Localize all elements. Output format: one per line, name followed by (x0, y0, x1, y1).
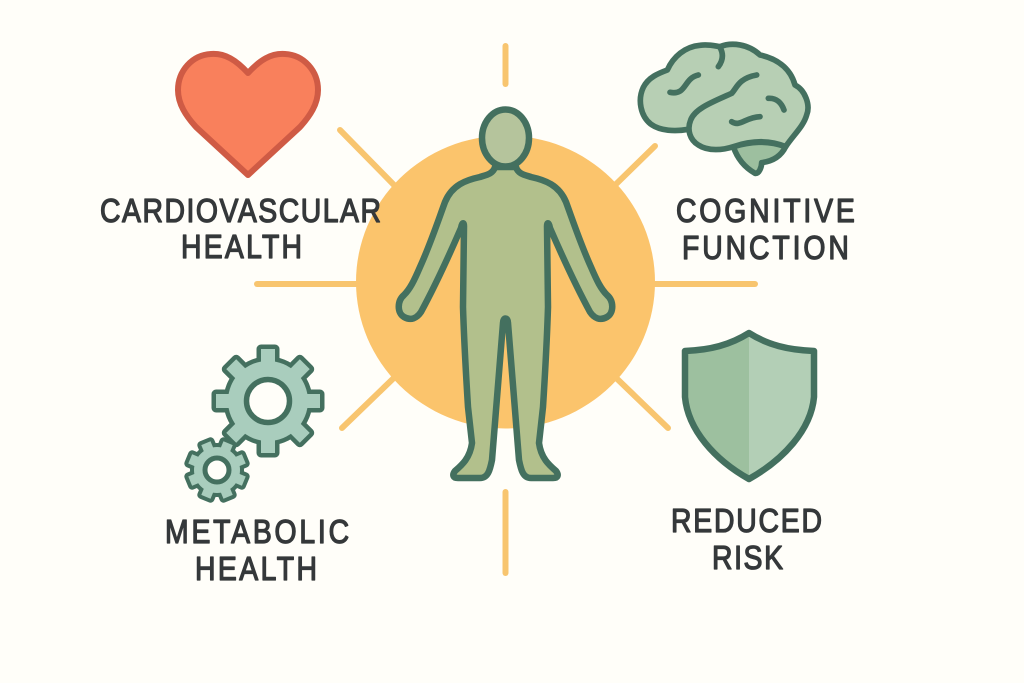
brain outline (640, 44, 808, 150)
label: reduced risk: RISK (712, 539, 783, 577)
label: cardiovascular health: CARDIOVASCULAR (100, 192, 381, 230)
label: reduced risk: REDUCED (671, 502, 822, 540)
label: cognitive function (676, 192, 855, 267)
icon: heart (178, 54, 318, 175)
label: metabolic health: METABOLIC (165, 513, 349, 551)
label: metabolic health: HEALTH (195, 550, 317, 588)
label: cognitive function: FUNCTION (682, 229, 849, 267)
icon: human figure (399, 110, 612, 478)
brain grooves (670, 47, 784, 123)
label: cardiovascular health: HEALTH (181, 228, 302, 266)
label: cognitive function: COGNITIVE (676, 192, 855, 230)
sun rays (257, 46, 755, 573)
label: cardiovascular health (100, 192, 381, 266)
icon: small gear (188, 441, 246, 499)
icon: brain (640, 44, 808, 173)
label: reduced risk (671, 502, 822, 577)
label: metabolic health (165, 513, 349, 588)
brain cerebellum (733, 142, 786, 173)
sun circle (356, 136, 655, 428)
icon: shield (685, 333, 814, 479)
icon: large gear (216, 349, 320, 453)
